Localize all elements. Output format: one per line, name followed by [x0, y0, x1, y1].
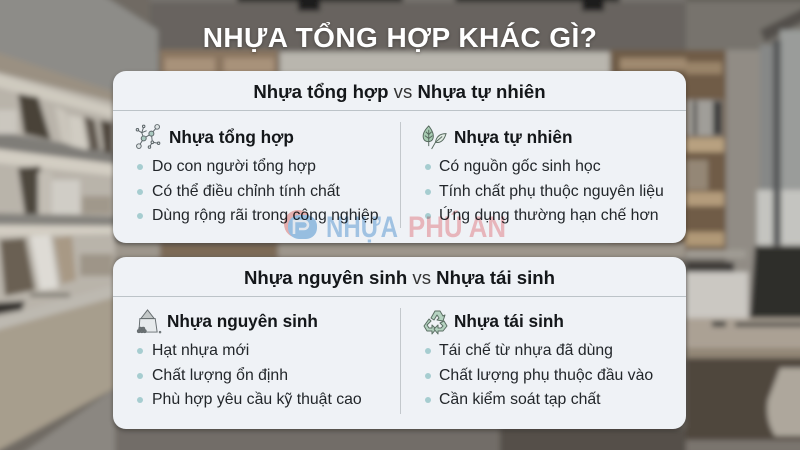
bullet list: virgin: Hạt nhựa mới — [152, 342, 249, 359]
panel heading: Nhựa nguyên sinh vs Nhựa tái sinh — [244, 267, 555, 288]
watermark emblem — [284, 210, 317, 239]
left wall shelving — [0, 50, 115, 115]
bullet list: recycled: Cần kiểm soát tạp chất — [439, 391, 601, 408]
title: NHỰA TỔNG HỢP KHÁC GÌ? — [203, 22, 597, 53]
bullet list: synthetic: Có thể điều chỉnh tính chất — [152, 183, 340, 200]
watermark logo — [284, 210, 506, 243]
bullet list: virgin: Phù hợp yêu cầu kỹ thuật cao — [152, 391, 362, 408]
bullet list: recycled — [425, 342, 653, 408]
icon: recycling arrows — [424, 310, 448, 334]
panel heading: Nhựa tổng hợp vs Nhựa tự nhiên — [253, 81, 546, 102]
right side — [686, 52, 726, 252]
icon: resin sack — [136, 309, 162, 334]
panel heading — [113, 71, 686, 111]
column title: virgin: Nhựa nguyên sinh — [167, 311, 318, 331]
divider between columns — [400, 122, 401, 228]
bullet list: virgin: Chất lượng ổn định — [152, 367, 288, 384]
bullet list: natural: Tính chất phụ thuộc nguyên liệu — [439, 183, 664, 200]
bullet list: natural — [425, 158, 664, 224]
bullet list: synthetic: Dùng rộng rãi trong công nghiệp — [152, 207, 379, 224]
centre gaps — [115, 243, 685, 258]
divider between columns — [400, 308, 401, 414]
bullet list: natural: Ứng dụng thường hạn chế hơn — [439, 207, 659, 224]
bullet list: synthetic: Do con người tổng hợp — [152, 158, 316, 175]
icon: molecule — [136, 124, 160, 149]
panel: virgin vs recycled plastic — [113, 257, 686, 429]
bullet list: recycled: Tái chế từ nhựa đã dùng — [439, 342, 613, 359]
watermark text — [326, 210, 506, 244]
panel heading — [113, 257, 686, 297]
panel: synthetic vs natural plastic — [113, 71, 686, 243]
bullet list: synthetic — [137, 158, 379, 224]
column title: natural: Nhựa tự nhiên — [454, 127, 572, 147]
bullet list: natural: Có nguồn gốc sinh học — [439, 158, 601, 175]
bullet list: virgin — [137, 342, 362, 408]
bullet list: recycled: Chất lượng phụ thuộc đầu vào — [439, 367, 653, 384]
icon: leaves — [422, 125, 447, 150]
column title: recycled: Nhựa tái sinh — [454, 311, 564, 331]
column title: synthetic: Nhựa tổng hợp — [169, 127, 294, 147]
